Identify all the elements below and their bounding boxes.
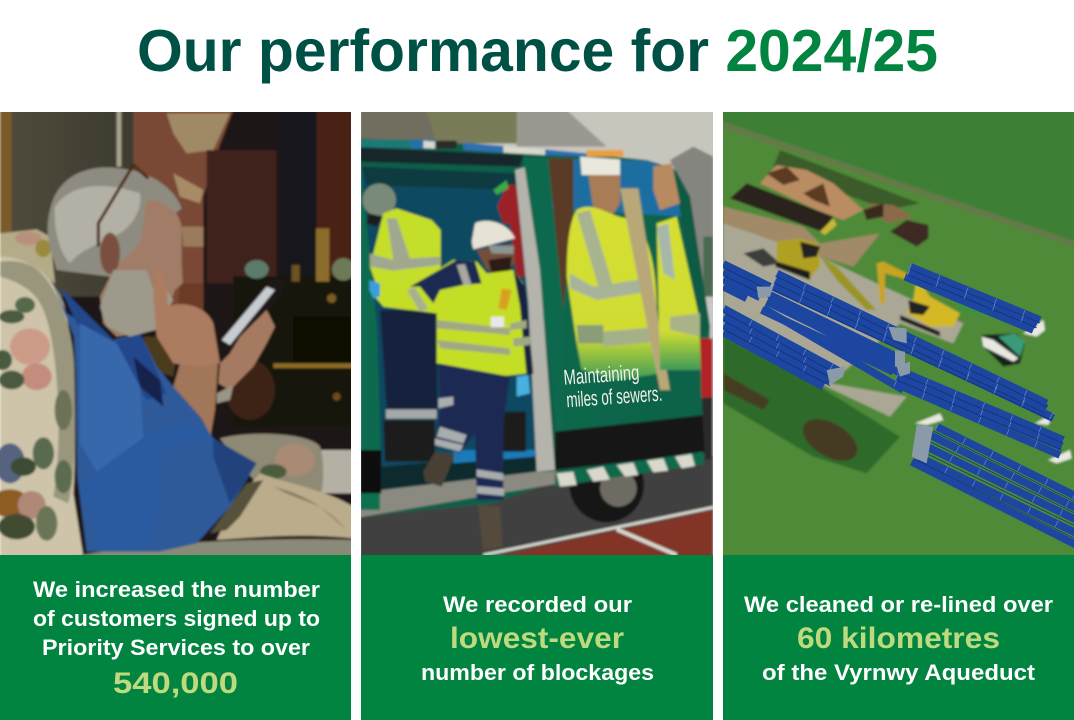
wheel [569, 472, 644, 523]
lower hedge [723, 337, 900, 473]
panel: priority services [0, 110, 355, 720]
caption panel 2: number of blockages [421, 660, 654, 685]
caption panel 3 [723, 555, 1074, 720]
phone and hand [233, 280, 286, 322]
trousers [217, 473, 353, 540]
caption panel 2: lowest-ever [450, 622, 625, 655]
lower door black [555, 415, 705, 470]
red sling [497, 185, 525, 277]
wraps [915, 320, 1072, 463]
photo: sewer van with workers [360, 110, 717, 560]
van slogan: Maintaining [563, 360, 640, 390]
printed worker [580, 157, 620, 175]
caption panel 2: We recorded our [443, 592, 632, 617]
worker in cab back [363, 183, 396, 217]
earth mound [760, 165, 863, 220]
blue pipe bundles [723, 264, 1074, 545]
seat cushion [78, 538, 351, 555]
hair [48, 167, 182, 277]
worker in front [472, 221, 515, 249]
photo: man using phone in armchair [0, 110, 355, 560]
door frame [515, 167, 555, 472]
forearm [173, 357, 218, 435]
van slogan [564, 365, 662, 408]
panel: aqueduct [720, 110, 1074, 720]
excavators [777, 238, 820, 280]
face [100, 200, 183, 337]
concrete pad [723, 223, 963, 417]
caption panel 3: 60 kilometres [797, 622, 1000, 655]
glasses [98, 165, 148, 247]
caption panel 1: 540,000 [113, 667, 238, 700]
shirt [50, 277, 257, 552]
sliding door [523, 158, 710, 432]
caption panel 1: We increased the number [33, 577, 320, 602]
trousers [435, 363, 510, 500]
caption panel 1 [0, 555, 351, 720]
printed second worker [653, 163, 680, 210]
caption panel 3: We cleaned or re-lined over [744, 592, 1053, 617]
van slogan: miles of sewers. [566, 382, 663, 412]
caption panel 2 [361, 555, 713, 720]
chair back [0, 229, 55, 283]
photo: aerial view of blue pipes [720, 110, 1074, 560]
cargo opening [362, 167, 537, 490]
panel: blockages [360, 110, 717, 720]
caption panel 1: of customers signed up to [33, 606, 320, 631]
beard [100, 270, 173, 337]
van body [360, 138, 710, 517]
hand at chin [153, 267, 220, 367]
chair right arm [220, 434, 323, 497]
caption panel 3: of the Vyrnwy Aqueduct [762, 660, 1036, 685]
caption panel 1: Priority Services to over [42, 635, 310, 660]
title: Our performance for 2024/25 [137, 18, 938, 84]
